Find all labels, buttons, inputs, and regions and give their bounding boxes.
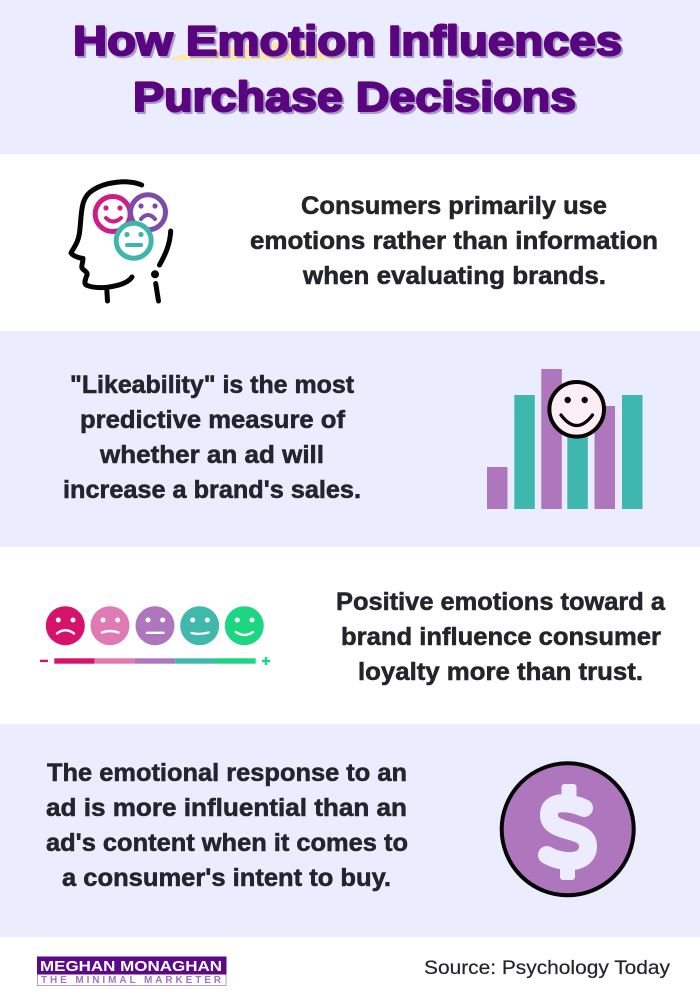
scale bar xyxy=(54,658,256,664)
very sad face xyxy=(46,606,85,645)
text block: whether an ad will xyxy=(99,441,324,469)
head outline xyxy=(71,182,171,301)
text block: Consumers primarily use xyxy=(301,192,607,220)
text block: ad is more influential than an xyxy=(46,794,407,822)
icon: smiley xyxy=(549,382,604,437)
panel: emotions over information xyxy=(0,154,700,331)
text block xyxy=(250,192,658,290)
neutral face xyxy=(116,223,151,258)
minus sign xyxy=(40,660,48,662)
text block: Positive emotions toward a xyxy=(336,588,666,616)
source credit: Source: Psychology Today xyxy=(424,958,671,979)
text block xyxy=(336,588,666,686)
bar chart with smiley xyxy=(487,369,642,509)
text block xyxy=(63,371,361,504)
text block: emotions rather than information xyxy=(250,227,658,255)
text block: "Likeability" is the most xyxy=(70,371,355,399)
text block: The emotional response to an xyxy=(47,759,407,787)
text block xyxy=(46,759,408,892)
plus sign xyxy=(262,657,270,665)
logo: MEGHAN MONAGHAN xyxy=(40,958,222,975)
icon: head with three emotion faces xyxy=(71,182,171,301)
panel: emotional response xyxy=(0,724,700,937)
title: How Emotion Influences xyxy=(73,17,622,64)
panel: positive emotions xyxy=(0,547,700,724)
happy face xyxy=(225,606,264,645)
text block: predictive measure of xyxy=(80,406,346,434)
title: Purchase Decisions xyxy=(133,73,576,120)
panel: likeability xyxy=(0,331,700,547)
text block: when evaluating brands. xyxy=(302,262,606,290)
yellow highlight behind title xyxy=(170,42,342,60)
happy face xyxy=(95,196,130,232)
panel: footer xyxy=(0,937,700,1000)
content face xyxy=(180,606,219,645)
panel: title band xyxy=(0,0,700,154)
logo xyxy=(37,956,226,986)
text block: brand influence consumer xyxy=(341,623,661,651)
logo: THE MINIMAL MARKETER xyxy=(41,975,222,986)
text block: a consumer's intent to buy. xyxy=(62,864,391,892)
emotion scale xyxy=(40,606,270,665)
sad face xyxy=(130,195,166,230)
text block: loyalty more than trust. xyxy=(358,658,643,686)
icon: dollar coin xyxy=(502,763,634,895)
neutral face xyxy=(136,606,174,645)
title xyxy=(73,17,622,120)
text block: increase a brand's sales. xyxy=(63,476,361,504)
sad face xyxy=(90,606,130,645)
text block: ad's content when it comes to xyxy=(46,829,408,857)
